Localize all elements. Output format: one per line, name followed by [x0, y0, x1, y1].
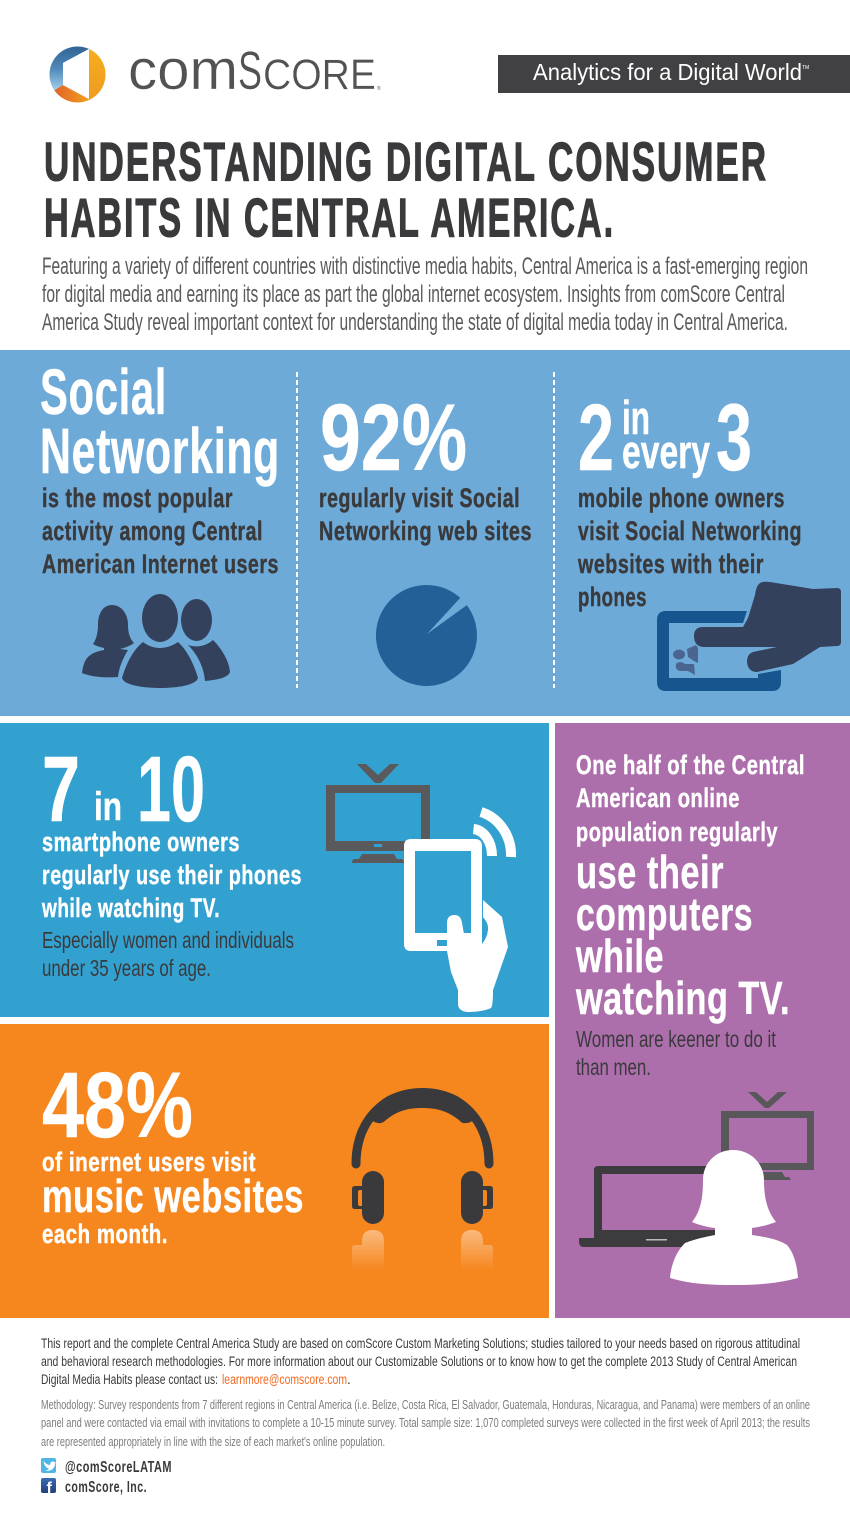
column: 92 percent: Networking web sites [319, 516, 532, 546]
text: one half: population regularly [576, 817, 778, 847]
headline stat: 7 in 10 [42, 737, 205, 841]
panel: social networking [0, 350, 850, 716]
icon: facebook: f [46, 1480, 52, 1497]
icon: television [326, 764, 430, 863]
column: 2 in every 3 [577, 385, 802, 612]
stat: 48 percent: 48% [42, 1053, 193, 1157]
headline stat: 7 in 10: 7 [42, 737, 80, 841]
column: 2 in every 3: 3 [716, 385, 752, 491]
text: use their computers: use their [576, 846, 724, 898]
column: social networking headline: American Internet users [42, 549, 279, 579]
text: music websites: of inernet users visit [42, 1147, 256, 1177]
logo wordmark: CORE [263, 51, 376, 99]
text: one half: American online [576, 783, 740, 813]
chart: pie 92 percent [376, 585, 477, 686]
column: 2 in every 3: phones [578, 582, 647, 612]
text: smartphone owners: regularly use their phones [42, 860, 302, 890]
tagline bar: Analytics for a Digital World [533, 59, 802, 85]
headline stat: 7 in 10: 10 [137, 737, 205, 841]
text: especially women: Especially women and individuals [42, 927, 294, 953]
text: facebook name: comScore, Inc. [65, 1479, 147, 1496]
column: 2 in every 3: websites with their [577, 549, 764, 579]
header: logo and tagline [50, 46, 850, 102]
icon: phone in hand with signal [404, 812, 511, 1012]
title [44, 130, 768, 248]
text: especially women: under 35 years of age. [42, 955, 211, 981]
text: use their computers [575, 846, 790, 1024]
footer: methodology: are represented appropriately in line with the size of each market's online population. [41, 1435, 385, 1449]
column: social networking headline [40, 356, 280, 579]
footer: contact text [41, 1336, 800, 1387]
icon: headphones [352, 1091, 493, 1270]
column: 92 percent [319, 385, 532, 546]
icon: woman silhouette [670, 1150, 798, 1285]
text: smartphone owners: while watching TV. [41, 893, 220, 923]
icon reflection [352, 1230, 493, 1270]
text: smartphone owners [41, 827, 302, 923]
column: 92 percent: 92% [320, 385, 467, 491]
text: especially women [42, 927, 294, 981]
header: logo and tagline: ® [377, 85, 381, 92]
text: women keener [576, 1026, 776, 1080]
footer: social links [41, 1458, 172, 1497]
text: women keener: Women are keener to do it [576, 1026, 776, 1052]
text: smartphone owners: smartphone owners [42, 827, 240, 857]
text: music websites [42, 1147, 304, 1249]
column: 2 in every 3: 2 [578, 385, 614, 491]
tagline bar: TM [802, 65, 809, 71]
icon: hand holding phone [657, 582, 841, 691]
icon: group of people [82, 594, 230, 688]
text: one half [576, 750, 805, 847]
panel: music websites [0, 1024, 549, 1318]
text: twitter handle: @comScoreLATAM [65, 1459, 172, 1476]
footer: methodology [41, 1398, 810, 1449]
footer: contact text: learnmore@comscore.com [222, 1372, 347, 1387]
logo wordmark: com [128, 38, 238, 102]
column: social networking headline: activity among Central [42, 516, 263, 546]
icon: twitter [41, 1458, 56, 1473]
text: use their computers: computers [576, 888, 753, 940]
tagline bar [498, 55, 850, 93]
logo wordmark [128, 38, 376, 102]
text: music websites: each month. [42, 1219, 168, 1249]
footer: contact text: Digital Media Habits please contact us: [41, 1372, 218, 1387]
logo wordmark: S [238, 41, 262, 101]
text: women keener: than men. [576, 1054, 651, 1080]
icon: comScore logo mark [49, 46, 107, 104]
column: 2 in every 3: every [622, 425, 710, 478]
intro paragraph [42, 253, 808, 336]
icon: laptop [579, 1166, 717, 1247]
text: music websites: music websites [42, 1170, 304, 1222]
panel: computers while watching TV [555, 723, 850, 1318]
icon: television [721, 1092, 814, 1180]
column: social networking headline: Social [40, 356, 167, 428]
text: use their computers: while [575, 930, 664, 982]
column: social networking headline: is the most popular [42, 483, 233, 513]
headline stat: 7 in 10: in [94, 785, 122, 829]
column: 92 percent: regularly visit Social [319, 483, 520, 513]
column: social networking headline: Networking [40, 415, 280, 487]
panel: seven in ten [0, 723, 549, 1017]
footer: contact text: . [347, 1372, 351, 1387]
column: 2 in every 3: in [622, 391, 650, 444]
